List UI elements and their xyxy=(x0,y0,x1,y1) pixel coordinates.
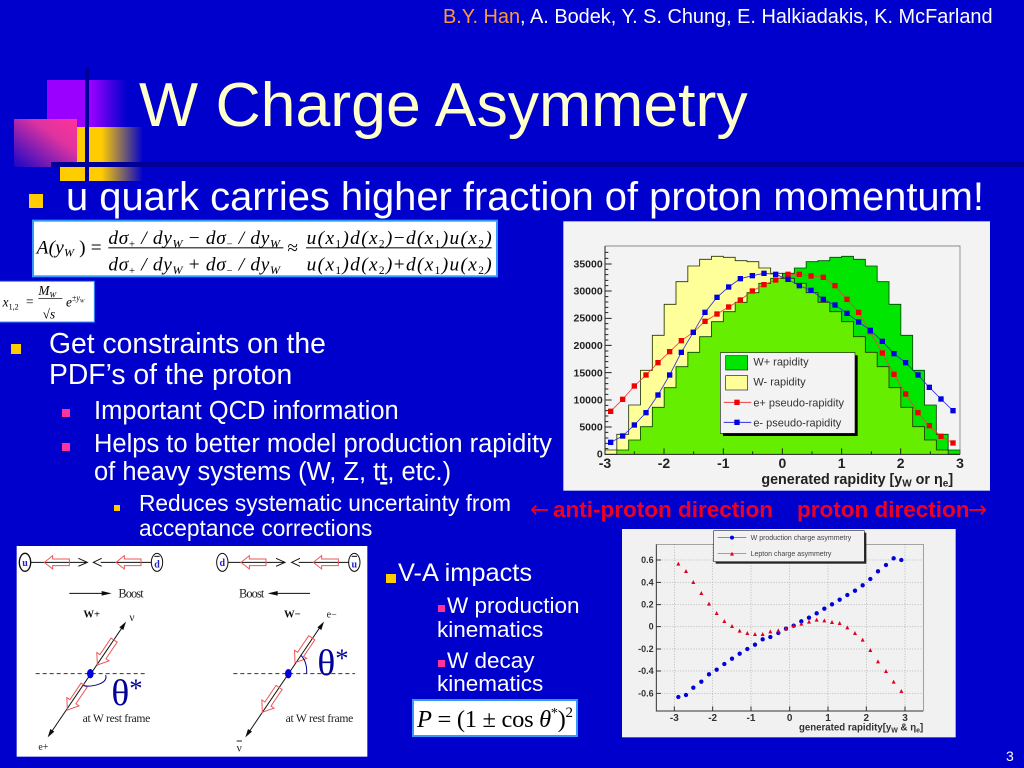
y axis labels xyxy=(574,259,603,461)
heading bullet: V-A impacts xyxy=(398,559,532,587)
bullet level 1: PDF’s of the proton xyxy=(49,358,292,390)
formula: asymmetry definition: −d(x xyxy=(394,228,433,249)
bullet: systematic uncertainty: Reduces systematic uncertainty from xyxy=(139,490,511,516)
direction labels: ← xyxy=(530,497,549,523)
formula: x1,2: M xyxy=(38,283,49,298)
formula: asymmetry definition: )u(x xyxy=(441,228,477,249)
W plus diagram: u xyxy=(22,558,28,569)
formula: asymmetry definition: 2 xyxy=(379,265,385,277)
W plus diagram: * xyxy=(129,673,143,703)
formula: asymmetry definition: 2 xyxy=(478,238,484,250)
y axis labels: -0.4 xyxy=(638,666,654,676)
main bullet: u quark carries higher fraction of proton momentum! xyxy=(66,175,984,219)
formula: asymmetry definition: + xyxy=(129,239,135,250)
legend: Lepton charge asymmetry xyxy=(751,551,832,558)
title: W Charge Asymmetry xyxy=(139,70,748,140)
formula: asymmetry definition: W xyxy=(172,263,183,277)
legend: e- pseudo-rapidity xyxy=(753,417,842,429)
x axis labels: 3 xyxy=(902,713,908,724)
W decay bullet: W decay xyxy=(447,648,535,673)
formula: asymmetry definition: − xyxy=(226,239,232,250)
y axis labels: 25000 xyxy=(574,314,603,325)
formula: asymmetry definition: W xyxy=(64,246,75,260)
x axis title: ] xyxy=(948,472,953,488)
bullet: systematic uncertainty: acceptance corrections xyxy=(139,515,372,541)
x axis labels: 2 xyxy=(864,713,870,724)
x axis labels: -3 xyxy=(599,455,611,471)
charge asymmetry chart xyxy=(622,529,956,737)
x axis title: or η xyxy=(912,472,943,488)
formula: asymmetry definition: W xyxy=(270,263,281,277)
y axis labels: 10000 xyxy=(574,395,603,406)
formula: x1,2: W xyxy=(49,291,57,300)
W minus diagram: e− xyxy=(327,610,337,621)
y axis labels: -0.2 xyxy=(638,644,654,654)
page number: 3 xyxy=(1006,748,1014,764)
grid xyxy=(656,544,923,711)
formula: asymmetry definition: 2 xyxy=(379,238,385,250)
x axis title: & η xyxy=(898,722,916,733)
bullet: QCD information: Important QCD information xyxy=(94,397,399,425)
formula: polarization: P = (1 ± cos θ xyxy=(417,706,551,733)
formula: asymmetry definition: dσ xyxy=(206,228,226,249)
formula: polarization xyxy=(413,700,577,736)
bullet level 1 xyxy=(11,327,326,390)
legend: W- rapidity xyxy=(753,377,806,389)
y axis labels xyxy=(638,555,654,698)
W production bullet xyxy=(437,593,580,642)
formula: polarization: ) xyxy=(558,706,566,733)
formula: asymmetry definition: W xyxy=(172,236,183,250)
y axis labels: 15000 xyxy=(574,368,603,379)
x axis title: ] xyxy=(920,722,923,733)
W decay bullet: kinematics xyxy=(437,671,543,696)
x axis labels: -3 xyxy=(670,713,679,724)
formula: asymmetry definition: +d(x xyxy=(394,255,433,276)
formula: asymmetry definition: )u(x xyxy=(441,255,477,276)
direction labels: anti-proton direction xyxy=(553,497,773,522)
x axis title: W xyxy=(891,727,898,734)
y axis labels: 0.4 xyxy=(641,577,654,587)
formula: asymmetry definition: 1 xyxy=(435,238,440,250)
y axis labels: 5000 xyxy=(579,422,603,433)
bullet: systematic uncertainty xyxy=(114,490,511,541)
W minus diagram: * xyxy=(335,643,349,673)
formula: x1,2: 1,2 xyxy=(9,302,19,311)
bullet: production rapidity xyxy=(62,430,552,486)
formula: asymmetry definition: 2 xyxy=(478,265,484,277)
formula: asymmetry definition: 1 xyxy=(335,265,341,277)
formula: asymmetry definition: + xyxy=(183,255,205,276)
x axis labels: 0 xyxy=(787,713,793,724)
formula: asymmetry definition: )d(x xyxy=(341,255,378,276)
bullet: production rapidity: Helps to better model production rapidity xyxy=(94,430,552,458)
formula: asymmetry definition: / dy xyxy=(233,228,270,249)
formula: x1,2: = xyxy=(26,294,34,309)
x axis labels: -1 xyxy=(717,455,730,471)
x axis labels: 1 xyxy=(838,455,846,471)
W plus diagram: W+ xyxy=(83,610,100,621)
W production bullet: kinematics xyxy=(437,617,543,642)
axes xyxy=(605,246,960,454)
W plus diagram: e+ xyxy=(38,742,49,753)
x axis labels: 1 xyxy=(825,713,831,724)
W minus diagram: u xyxy=(352,559,358,570)
formula: asymmetry definition: dσ xyxy=(206,255,226,276)
x axis labels xyxy=(670,713,908,724)
formula: asymmetry definition: − xyxy=(183,228,205,249)
decorative logo blocks xyxy=(14,68,1024,181)
y axis labels: 0.2 xyxy=(641,600,654,610)
formula: x1,2: x xyxy=(3,295,9,310)
direction labels: proton direction xyxy=(797,497,970,522)
W production bullet: W production xyxy=(447,593,580,618)
author line: B.Y. Han, A. Bodek, Y. S. Chung, E. Halkiadakis, K. McFarland xyxy=(443,6,993,28)
bullet: production rapidity: of heavy systems (W, Z, tt, etc.) xyxy=(94,458,451,486)
axes xyxy=(656,544,923,711)
W minus diagram: Boost xyxy=(239,587,265,601)
x axis title: W xyxy=(902,479,912,490)
formula: asymmetry definition: + xyxy=(129,266,135,277)
legend: W+ rapidity xyxy=(753,357,809,369)
bullet level 1: Get constraints on the xyxy=(49,327,326,359)
formula: asymmetry definition: u(x xyxy=(307,228,334,249)
W minus diagram: ν xyxy=(237,743,242,755)
formula: asymmetry definition: 1 xyxy=(435,265,440,277)
formula: asymmetry definition: / dy xyxy=(233,255,270,276)
rapidity histogram chart xyxy=(563,221,990,491)
W decay bullet xyxy=(437,648,543,696)
y axis labels: 35000 xyxy=(574,259,603,270)
formula: x1,2: e xyxy=(66,295,72,310)
formula: asymmetry definition: dσ xyxy=(108,228,128,249)
e- pseudo-rapidity series xyxy=(611,273,953,442)
W plus diagram: Boost xyxy=(118,587,144,601)
formula: asymmetry definition: dσ xyxy=(108,255,128,276)
formula: asymmetry definition: − xyxy=(226,266,232,277)
y axis labels: 20000 xyxy=(574,341,603,352)
e+ pseudo-rapidity series xyxy=(611,274,953,443)
x axis title: e xyxy=(943,479,949,490)
formula: asymmetry definition: W xyxy=(270,236,281,250)
formula: asymmetry definition: 1 xyxy=(335,238,341,250)
W minus diagram: W− xyxy=(284,610,301,621)
formula: asymmetry definition: ) = xyxy=(74,237,102,258)
legend xyxy=(720,353,858,436)
y axis labels: 0.6 xyxy=(641,555,654,565)
x axis labels xyxy=(599,455,964,471)
legend: W production charge asymmetry xyxy=(751,535,852,542)
W production asymmetry series xyxy=(678,558,901,697)
x axis labels: -2 xyxy=(658,455,670,471)
legend: e+ pseudo-rapidity xyxy=(753,397,845,409)
formula: polarization: * xyxy=(551,706,558,721)
formula: x1,2: ±y xyxy=(72,294,80,303)
W minus diagram: d xyxy=(220,558,226,569)
formula: asymmetry definition: A(y xyxy=(37,237,64,258)
W plus diagram xyxy=(19,553,163,753)
y axis labels: 30000 xyxy=(574,287,603,298)
formula: asymmetry definition: u(x xyxy=(307,255,334,276)
W plus diagram: θ xyxy=(111,673,129,714)
formula: asymmetry definition: ) xyxy=(484,228,492,249)
W minus diagram: at W rest frame xyxy=(286,712,353,725)
W minus diagram xyxy=(217,553,360,755)
W plus diagram: ν xyxy=(129,612,134,624)
lepton asymmetry series xyxy=(678,564,901,691)
y axis labels: 0 xyxy=(597,450,603,461)
y axis labels: 0 xyxy=(649,622,654,632)
formula: x1,2 xyxy=(0,281,94,322)
W plus diagram: d xyxy=(154,559,160,570)
x axis title: generated rapidity[y xyxy=(799,722,891,733)
legend xyxy=(714,531,866,564)
formula: asymmetry definition: ) xyxy=(484,255,492,276)
x axis labels: 3 xyxy=(956,455,964,471)
x axis title: generated rapidity [y xyxy=(761,472,902,488)
W minus diagram: θ xyxy=(317,643,335,684)
formula: x1,2: W xyxy=(80,298,85,304)
formula: asymmetry definition: )d(x xyxy=(341,228,378,249)
y axis labels: -0.6 xyxy=(638,688,654,698)
x axis labels: -1 xyxy=(747,713,756,724)
formula: asymmetry definition: ≈ xyxy=(287,238,298,259)
x axis title: e xyxy=(916,727,920,734)
formula: polarization: 2 xyxy=(566,705,573,721)
formula: asymmetry definition: ) xyxy=(385,255,392,276)
W minus and W plus histograms xyxy=(605,256,960,454)
direction labels: → xyxy=(968,497,987,523)
formula: asymmetry definition: / dy xyxy=(136,255,172,276)
formula: asymmetry definition: / dy xyxy=(136,228,172,249)
W plus diagram: at W rest frame xyxy=(83,712,150,725)
formula: asymmetry definition: ) xyxy=(385,228,392,249)
x axis labels: -2 xyxy=(708,713,718,724)
x axis labels: 0 xyxy=(778,455,786,471)
formula: asymmetry definition xyxy=(33,221,497,277)
x axis labels: 2 xyxy=(897,455,905,471)
V-A impacts text xyxy=(386,559,580,696)
direction labels xyxy=(530,497,987,523)
formula: x1,2: √s xyxy=(43,306,55,321)
body bullets: constraints on PDFs xyxy=(11,327,552,541)
W boson decay diagrams xyxy=(17,546,367,757)
